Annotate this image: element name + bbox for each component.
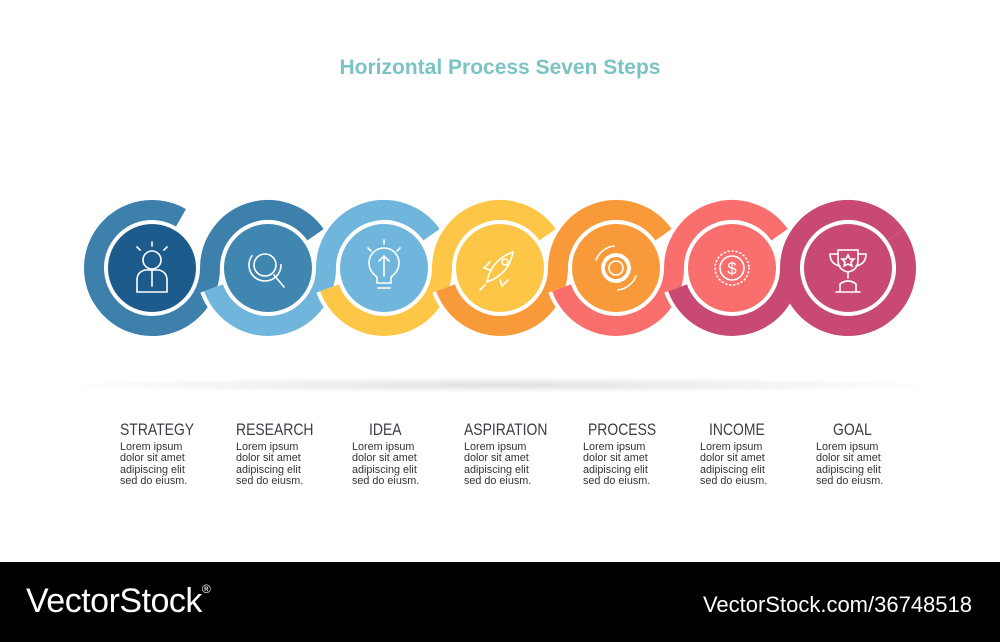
icon: trophy xyxy=(830,250,866,292)
label: process: dolor sit amet xyxy=(583,452,648,464)
label: aspiration xyxy=(464,420,547,487)
label: strategy: STRATEGY xyxy=(120,420,194,439)
step 7 ring remainder xyxy=(790,235,906,326)
label: idea xyxy=(352,420,419,487)
footer bar xyxy=(0,562,1000,642)
label: process xyxy=(583,420,656,487)
icon: dollar xyxy=(715,251,749,285)
icons xyxy=(137,240,866,292)
icon: magnifier xyxy=(249,249,284,287)
icon: dollar: $ xyxy=(727,259,737,278)
label: goal: adipiscing elit xyxy=(816,464,881,476)
label: process: PROCESS xyxy=(588,420,656,439)
icon: rocket xyxy=(480,252,513,290)
label: strategy: dolor sit amet xyxy=(120,452,185,464)
label: income: adipiscing elit xyxy=(700,464,765,476)
label: strategy: adipiscing elit xyxy=(120,464,185,476)
icon: person xyxy=(137,242,167,292)
label: goal: dolor sit amet xyxy=(816,452,881,464)
label: income xyxy=(700,420,767,487)
strand 6 xyxy=(678,210,896,326)
icon: bulb xyxy=(368,240,400,288)
label: aspiration: Lorem ipsum xyxy=(464,441,526,453)
icon: gear xyxy=(596,246,636,290)
label: process: sed do eiusm. xyxy=(583,475,650,487)
label: process: adipiscing elit xyxy=(583,464,648,476)
strand 5 xyxy=(562,210,780,326)
strand 3 xyxy=(330,210,548,326)
label: idea: dolor sit amet xyxy=(352,452,417,464)
label: goal: GOAL xyxy=(833,420,872,439)
strand 2 xyxy=(214,210,432,326)
inner discs xyxy=(108,224,892,312)
shadow xyxy=(60,377,940,393)
label: idea: IDEA xyxy=(369,420,402,439)
label: goal xyxy=(816,420,883,487)
label: research: sed do eiusm. xyxy=(236,475,303,487)
label: strategy: Lorem ipsum xyxy=(120,441,182,453)
label: income: INCOME xyxy=(709,420,765,439)
label: aspiration: sed do eiusm. xyxy=(464,475,531,487)
label: aspiration: adipiscing elit xyxy=(464,464,529,476)
label: research: dolor sit amet xyxy=(236,452,301,464)
footer logo: VectorStock® xyxy=(26,582,210,620)
label: process: Lorem ipsum xyxy=(583,441,645,453)
label: research xyxy=(236,420,313,487)
strand 1 xyxy=(94,210,316,326)
footer url: VectorStock.com/36748518 xyxy=(703,592,972,617)
strand 4 xyxy=(446,210,664,326)
label: research: adipiscing elit xyxy=(236,464,301,476)
label: aspiration: dolor sit amet xyxy=(464,452,529,464)
chain of seven step circles xyxy=(84,200,916,391)
label: goal: Lorem ipsum xyxy=(816,441,878,453)
label: idea: Lorem ipsum xyxy=(352,441,414,453)
label: income: dolor sit amet xyxy=(700,452,765,464)
label: idea: sed do eiusm. xyxy=(352,475,419,487)
label: aspiration: ASPIRATION xyxy=(464,420,547,439)
label: research: Lorem ipsum xyxy=(236,441,298,453)
label: strategy: sed do eiusm. xyxy=(120,475,187,487)
title: Horizontal Process Seven Steps xyxy=(340,56,660,79)
label: income: Lorem ipsum xyxy=(700,441,762,453)
label: research: RESEARCH xyxy=(236,420,313,439)
label: idea: adipiscing elit xyxy=(352,464,417,476)
label: income: sed do eiusm. xyxy=(700,475,767,487)
label: strategy xyxy=(120,420,194,487)
label: goal: sed do eiusm. xyxy=(816,475,883,487)
